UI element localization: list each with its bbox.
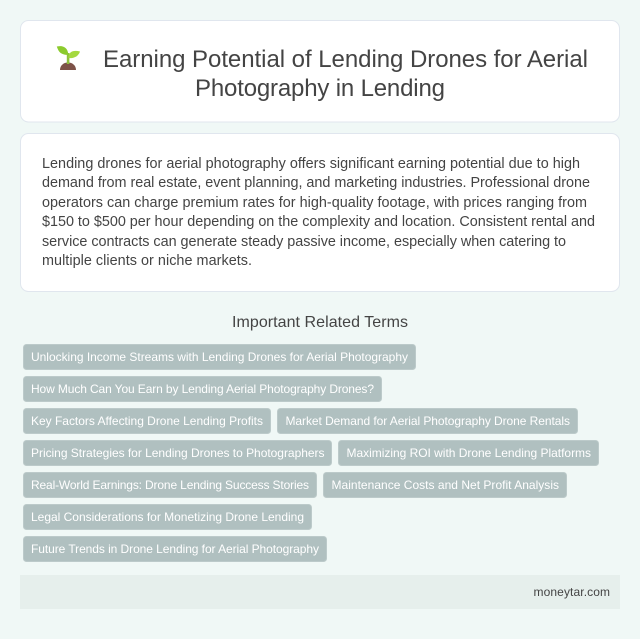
tag: Maximizing ROI with Drone Lending Platforms	[346, 446, 591, 460]
tag: Pricing Strategies for Lending Drones to Photographers	[31, 446, 324, 460]
tag: Key Factors Affecting Drone Lending Profits	[31, 414, 263, 428]
footer source: moneytar.com	[534, 585, 610, 599]
title	[103, 46, 588, 102]
description text: Lending drones for aerial photography offers significant earning potential due to high	[42, 156, 580, 172]
tag	[24, 376, 382, 402]
tag	[24, 536, 326, 562]
description text: $150 to $500 per hour depending on the complexity and location. Consistent rental and	[42, 214, 595, 230]
tag: How Much Can You Earn by Lending Aerial Photography Drones?	[31, 382, 374, 396]
tag	[24, 440, 332, 466]
title: Photography in Lending	[195, 75, 445, 102]
description text: service contracts can generate steady passive income, especially when catering to	[42, 234, 566, 250]
description text: operators can charge premium rates for high-quality footage, with prices ranging from	[42, 195, 587, 211]
tag	[24, 408, 270, 434]
heading: related terms: Important Related Terms	[232, 314, 408, 331]
panel: title header	[20, 20, 620, 122]
related term tags	[24, 344, 598, 562]
tag: Legal Considerations for Monetizing Drone Lending	[31, 510, 304, 524]
tag: Future Trends in Drone Lending for Aerial Photography	[31, 542, 319, 556]
tag	[338, 440, 598, 466]
title: Earning Potential of Lending Drones for Aerial	[103, 46, 588, 73]
panel: description	[20, 134, 620, 292]
tag: Unlocking Income Streams with Lending Drones for Aerial Photography	[31, 350, 408, 364]
tag	[24, 504, 312, 530]
tag	[324, 472, 566, 498]
tag	[24, 472, 316, 498]
description text: demand from real estate, event planning, and marketing industries. Professional drone	[42, 175, 590, 191]
description text	[42, 156, 595, 269]
tag	[278, 408, 578, 434]
tag: Maintenance Costs and Net Profit Analysis	[332, 478, 559, 492]
footer bar	[20, 575, 620, 609]
tag: Market Demand for Aerial Photography Drone Rentals	[286, 414, 570, 428]
description text: multiple clients or niche markets.	[42, 253, 252, 269]
icon: sprout	[57, 46, 80, 70]
tag	[24, 344, 416, 370]
tag: Real-World Earnings: Drone Lending Success Stories	[31, 478, 309, 492]
